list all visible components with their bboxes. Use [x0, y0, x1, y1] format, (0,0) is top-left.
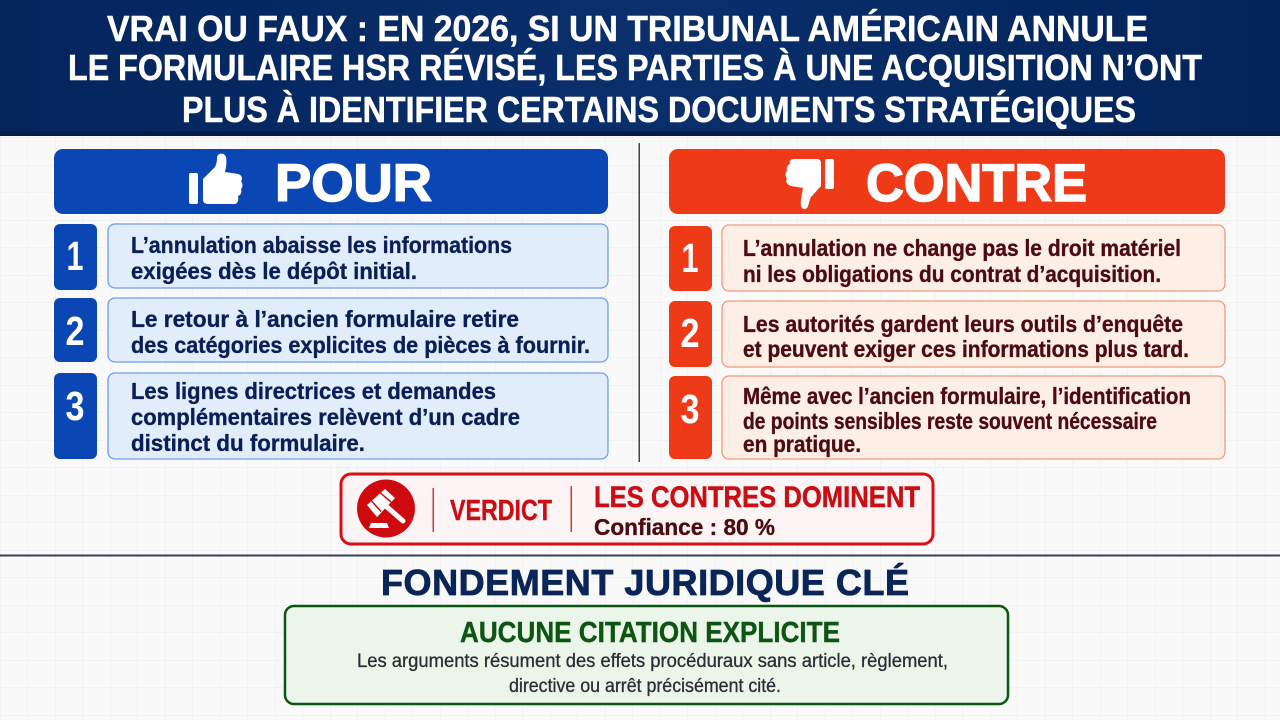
panel: legal basis: AUCUNE CITATION EXPLICITE — [460, 617, 840, 649]
pour argument 3: complémentaires relèvent d’un cadre — [131, 404, 520, 430]
contre argument 3: 3 — [680, 386, 700, 432]
verdict callout: Confiance : 80 % — [594, 514, 775, 540]
panel: legal basis — [285, 606, 1008, 704]
pour argument 3: Les lignes directrices et demandes — [131, 378, 496, 404]
icon: thumbs up — [189, 154, 242, 204]
pour header: POUR — [275, 154, 432, 213]
contre argument 1 — [669, 225, 1225, 291]
contre header — [669, 149, 1225, 214]
pour argument 2: 2 — [66, 308, 84, 354]
title banner: PLUS À IDENTIFIER CERTAINS DOCUMENTS STRATÉGIQUES — [182, 89, 1136, 130]
contre argument 1: ni les obligations du contrat d’acquisition. — [743, 261, 1161, 287]
icon: thumbs down — [786, 159, 834, 209]
contre argument 3: Même avec l’ancien formulaire, l’identification — [743, 383, 1191, 409]
panel: legal basis: directive ou arrêt précisément cité. — [509, 676, 781, 697]
contre argument 3 — [669, 376, 1225, 459]
verdict callout: LES CONTRES DOMINENT — [594, 481, 920, 514]
section heading: fondement juridique: FONDEMENT JURIDIQUE CLÉ — [381, 562, 909, 603]
pour argument 3 — [54, 373, 608, 459]
pour argument 2 — [54, 298, 608, 362]
contre argument 3: en pratique. — [743, 431, 861, 457]
title banner — [0, 0, 1280, 136]
contre argument 1: L’annulation ne change pas le droit matériel — [743, 235, 1181, 261]
pour argument 2: des catégories explicites de pièces à fournir. — [131, 332, 590, 358]
pour argument 1: exigées dès le dépôt initial. — [131, 258, 417, 284]
contre header: CONTRE — [866, 154, 1087, 213]
pour argument 3: distinct du formulaire. — [131, 430, 365, 456]
contre argument 3: de points sensibles reste souvent nécessaire — [743, 408, 1157, 434]
verdict callout — [341, 474, 933, 544]
pour argument 1: 1 — [66, 233, 84, 279]
contre argument 2: Les autorités gardent leurs outils d’enquête — [743, 311, 1183, 337]
pour header — [54, 149, 608, 214]
pour argument 3: 3 — [66, 383, 84, 429]
pour argument 2: Le retour à l’ancien formulaire retire — [131, 306, 519, 332]
panel: legal basis: Les arguments résument des effets procéduraux sans article, règlement, — [357, 651, 948, 672]
icon: gavel — [357, 480, 415, 538]
pour argument 1 — [54, 224, 608, 290]
contre argument 2: 2 — [680, 310, 700, 356]
panel: pour — [54, 149, 608, 459]
title banner: VRAI OU FAUX : EN 2026, SI UN TRIBUNAL AMÉRICAIN ANNULE — [107, 8, 1148, 49]
panel: contre — [669, 149, 1225, 459]
contre argument 1: 1 — [682, 235, 698, 281]
verdict callout: VERDICT — [450, 495, 552, 527]
contre argument 2 — [669, 301, 1225, 367]
contre argument 2: et peuvent exiger ces informations plus tard. — [743, 336, 1189, 362]
pour argument 1: L’annulation abaisse les informations — [131, 232, 512, 258]
